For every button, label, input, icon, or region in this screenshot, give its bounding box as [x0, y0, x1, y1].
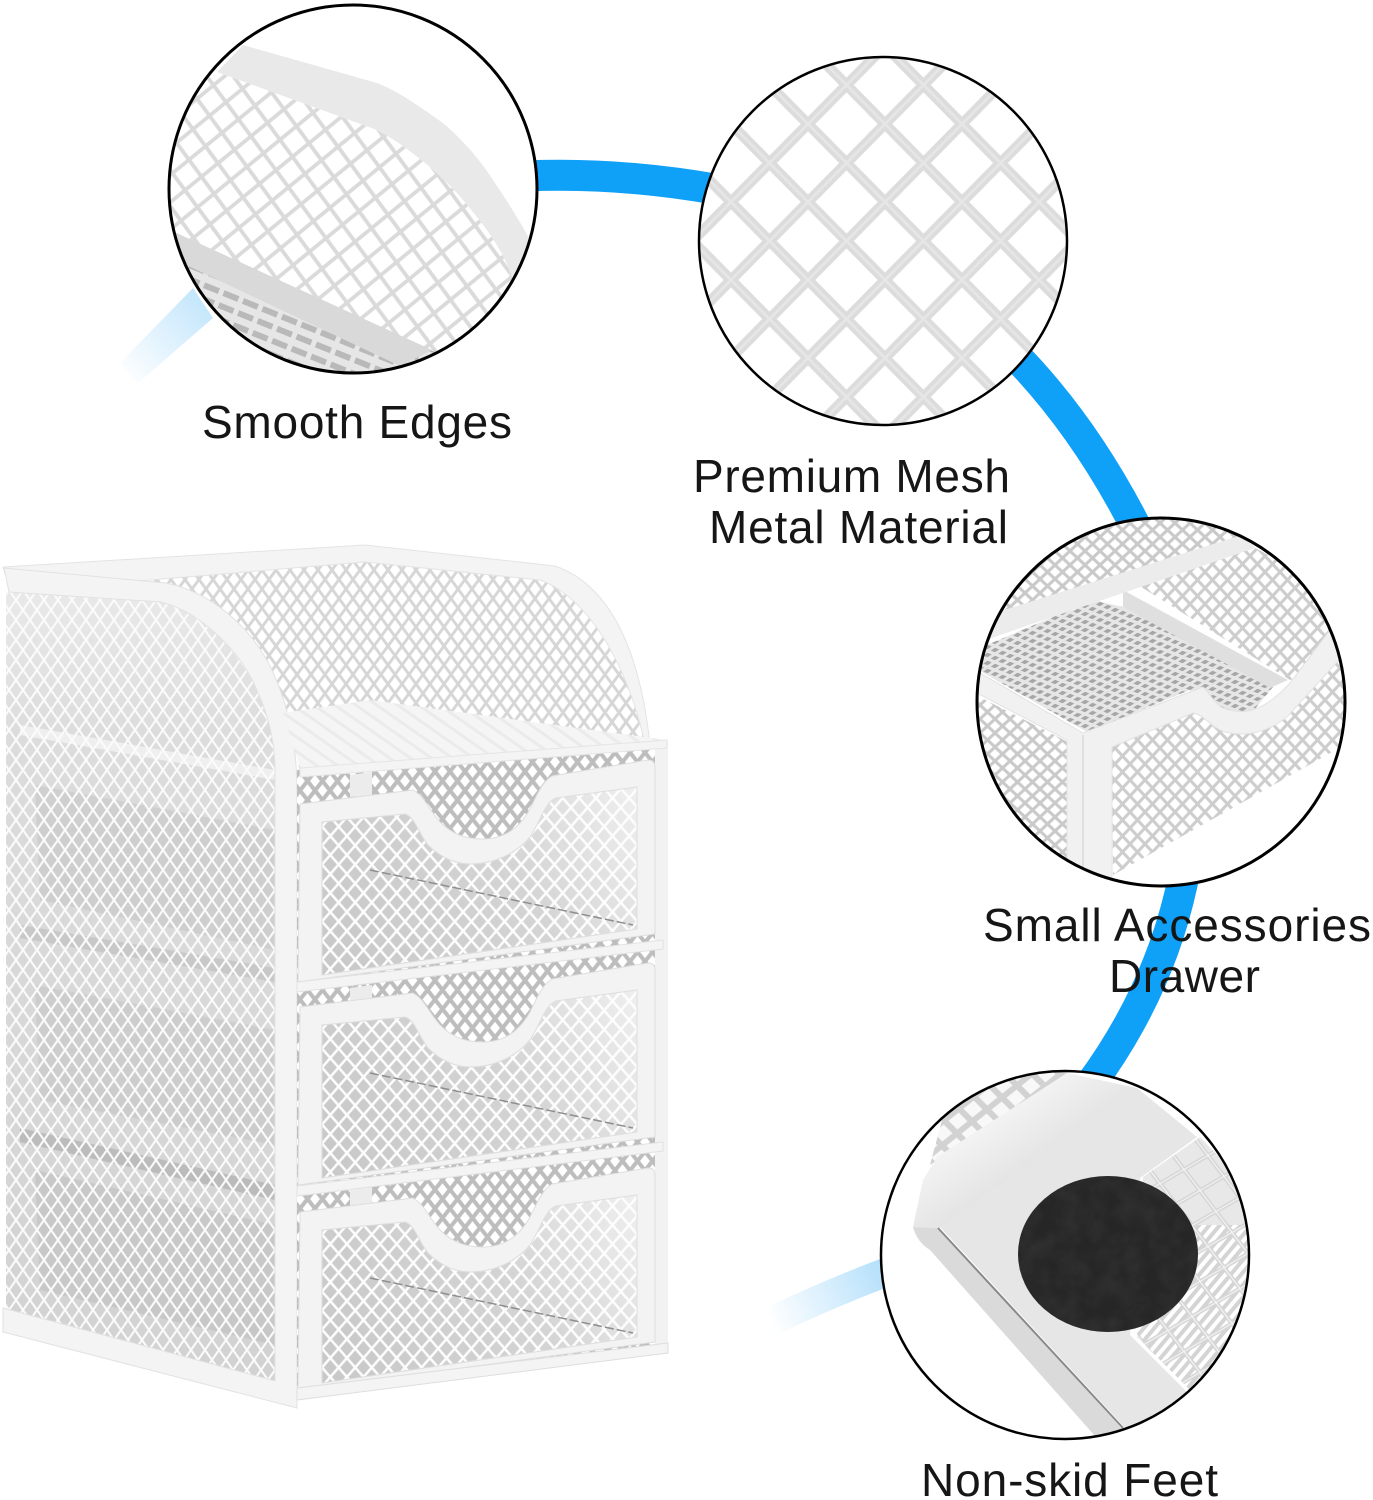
rail under drawer 1	[297, 940, 663, 992]
back mesh panel	[150, 560, 650, 772]
drawer 2	[298, 963, 655, 1185]
inset circle: non-skid feet	[881, 1060, 1260, 1439]
side mesh panel	[6, 592, 275, 1382]
inner vertical posts	[350, 772, 372, 1208]
drawer 1	[298, 760, 655, 982]
label: premium mesh metal material	[693, 450, 1010, 553]
inset circle: drawer close-up	[960, 510, 1360, 890]
label: small accessories drawer: Drawer	[1109, 950, 1260, 1002]
product: mesh desk organizer	[3, 545, 668, 1408]
label: small accessories drawer	[983, 899, 1371, 1002]
label: premium mesh metal material: Premium Mesh	[693, 450, 1010, 502]
icon: black felt pad	[1018, 1176, 1198, 1332]
interior back mesh	[297, 745, 660, 1395]
rail under drawer 2	[297, 1142, 663, 1196]
base rail	[297, 1343, 668, 1400]
fading arc tail: upper left	[120, 288, 213, 384]
label: small accessories drawer: Small Accessories	[983, 899, 1371, 951]
top rim	[3, 545, 650, 745]
blue connector arc	[525, 175, 1183, 1085]
drawer 3	[298, 1168, 655, 1390]
fading arc tail: lower	[770, 1270, 892, 1322]
top shelf	[283, 700, 667, 777]
label: premium mesh metal material: Metal Material	[709, 501, 1008, 553]
right post	[655, 742, 668, 1345]
inset circle: smooth edges	[160, 0, 550, 380]
side frame	[3, 568, 297, 1408]
inset circle: premium mesh	[690, 50, 1080, 440]
label: smooth edges: Smooth Edges	[202, 396, 512, 448]
